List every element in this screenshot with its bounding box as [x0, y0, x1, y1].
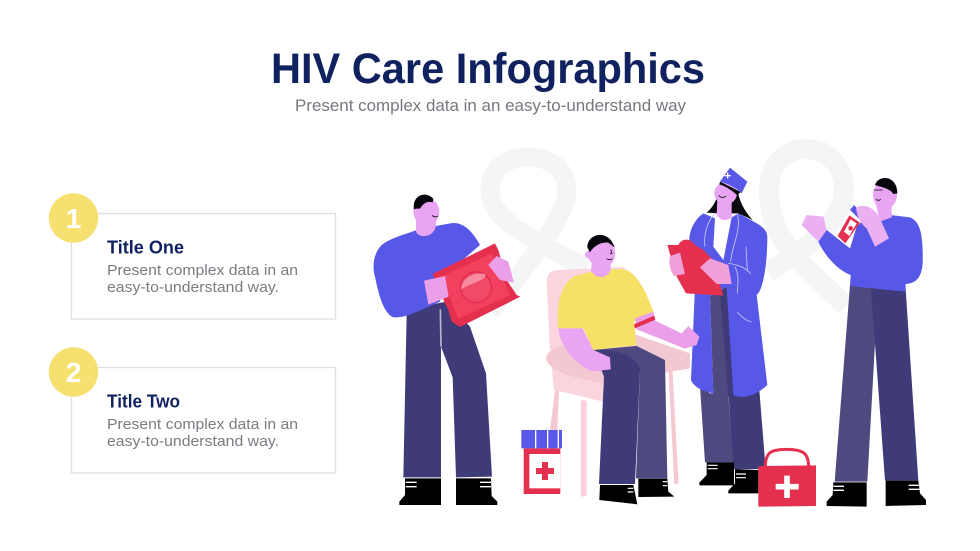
trousers light leg [835, 285, 875, 482]
hair [875, 178, 897, 194]
smile [719, 195, 726, 197]
icon: first aid kit [758, 449, 816, 507]
icon: medicine bottle [521, 430, 562, 494]
chair base [552, 367, 603, 402]
trousers dark leg [871, 287, 918, 481]
nurse trousers [700, 387, 733, 462]
number 1: 1 [66, 203, 81, 234]
forearm and hand [856, 206, 889, 247]
arm far [635, 312, 699, 349]
shoe stripes [628, 482, 667, 492]
trousers far leg [593, 346, 667, 478]
hand right [488, 256, 514, 283]
number 2: 2 [66, 357, 81, 388]
red cross [536, 462, 554, 480]
arm near [558, 328, 611, 371]
hair [587, 235, 615, 252]
nurse shoes [699, 462, 758, 493]
head [873, 181, 897, 209]
package ring [461, 272, 491, 303]
bottle pump [850, 205, 864, 218]
title: HIV Care Infographics [271, 45, 705, 93]
sanitizer bottle [838, 215, 860, 243]
hand left [424, 276, 449, 305]
bottle body [524, 448, 560, 494]
illustration: chair [546, 267, 690, 497]
white cross [776, 476, 799, 498]
bottle cap [521, 430, 562, 448]
shoes [827, 481, 926, 507]
hand on clipboard [669, 253, 685, 276]
fringe [719, 182, 741, 195]
subtitle: Present complex data in an easy-to-understand way [295, 96, 686, 115]
card body text: Present complex data in an [107, 262, 298, 279]
hair [414, 195, 433, 209]
kit handle [765, 449, 809, 467]
head [413, 198, 439, 226]
sweater [374, 223, 480, 317]
icon: left awareness ribbon [490, 157, 587, 312]
card outline [72, 368, 336, 473]
kit case [758, 465, 816, 507]
shoe stripes [406, 482, 491, 487]
chair seat [546, 335, 690, 383]
neck [717, 198, 732, 220]
sweater [818, 215, 923, 292]
card outline [72, 214, 336, 319]
condom package outer [433, 243, 520, 327]
hand on coat [700, 258, 732, 284]
panel: title two [49, 347, 336, 473]
t-shirt [558, 269, 653, 350]
panel: title one [49, 193, 336, 319]
raised hand [802, 215, 827, 242]
neck [875, 200, 892, 222]
number badge 1 [49, 193, 98, 243]
shoes [599, 479, 674, 504]
card body text: easy-to-understand way. [107, 279, 279, 296]
illustration: seated man [558, 235, 699, 504]
illustration: nurse with clipboard [667, 168, 767, 493]
trouser seam [438, 309, 443, 347]
face details [607, 249, 612, 260]
arm band [634, 316, 655, 328]
icon: right awareness ribbon [768, 149, 846, 306]
number badge 2 [49, 347, 98, 397]
trousers near leg [593, 350, 640, 484]
face details [874, 190, 883, 200]
shoe stripes [708, 465, 746, 478]
chair legs [550, 390, 559, 430]
shirt [710, 216, 733, 260]
card body text: Present complex data in an [107, 416, 298, 433]
neck [416, 213, 436, 236]
head [714, 182, 737, 204]
package inner [442, 253, 510, 318]
card heading: Title One [107, 238, 184, 258]
clipboard [667, 240, 723, 296]
card body text: easy-to-understand way. [107, 433, 279, 450]
medical cap [720, 168, 747, 193]
trousers [403, 302, 492, 477]
shoe stripes [833, 485, 919, 490]
long hair [707, 190, 753, 220]
illustration: man with sanitizer [802, 178, 926, 507]
neck and head [591, 260, 611, 278]
coat seams [705, 213, 751, 322]
lab coat [689, 213, 767, 397]
card heading: Title Two [107, 392, 180, 412]
illustration: man holding package [374, 195, 520, 505]
smile [432, 215, 438, 217]
shoes [399, 478, 497, 505]
chair back [547, 267, 630, 350]
